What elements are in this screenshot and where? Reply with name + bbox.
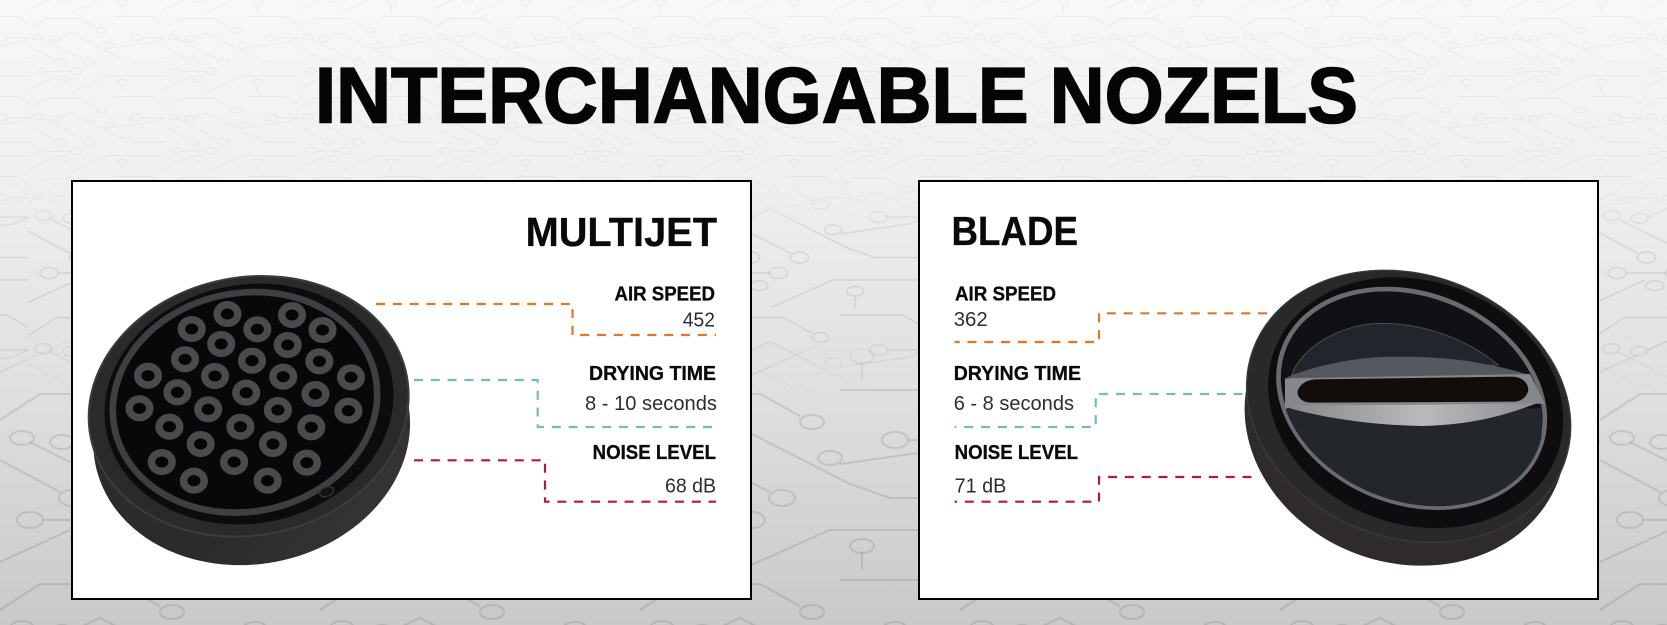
label: noise level: NOISE LEVEL bbox=[955, 441, 1078, 464]
callout line: noise level bbox=[414, 460, 716, 502]
blade: lower lens bbox=[1287, 399, 1537, 426]
blade: air slot bbox=[1298, 377, 1528, 403]
icon: multijet nozzle photo bbox=[66, 249, 433, 592]
heading: multijet: MULTIJET bbox=[526, 209, 717, 255]
blade: slot frame bbox=[1285, 374, 1545, 409]
callout line: drying time bbox=[955, 394, 1243, 427]
label: drying time: DRYING TIME bbox=[954, 362, 1081, 385]
heading: blade: BLADE bbox=[952, 208, 1078, 254]
callout line: air speed bbox=[955, 313, 1267, 342]
callout line: drying time bbox=[414, 380, 716, 427]
value: air speed: 452 bbox=[683, 308, 715, 332]
icon: blade nozzle photo bbox=[1244, 270, 1572, 566]
label: air speed: AIR SPEED bbox=[955, 283, 1056, 306]
value: air speed: 362 bbox=[954, 308, 988, 331]
title: INTERCHANGABLE NOZELS bbox=[315, 51, 1358, 140]
value: drying time: 6 - 8 seconds bbox=[954, 392, 1074, 415]
nozzle holes bbox=[129, 305, 361, 490]
value: noise level: 71 dB bbox=[955, 475, 1006, 498]
label: noise level: NOISE LEVEL bbox=[593, 441, 716, 464]
panel: blade bbox=[919, 181, 1609, 610]
label: air speed: AIR SPEED bbox=[614, 283, 715, 306]
panel: multijet bbox=[66, 181, 751, 599]
value: noise level: 68 dB bbox=[665, 475, 716, 498]
floor of nozzle bbox=[1286, 322, 1542, 506]
callout line: noise level bbox=[955, 477, 1252, 502]
value: drying time: 8 - 10 seconds bbox=[585, 392, 717, 415]
label: drying time: DRYING TIME bbox=[589, 362, 716, 385]
blade: upper lens bbox=[1287, 357, 1530, 381]
callout line: air speed bbox=[376, 304, 716, 335]
